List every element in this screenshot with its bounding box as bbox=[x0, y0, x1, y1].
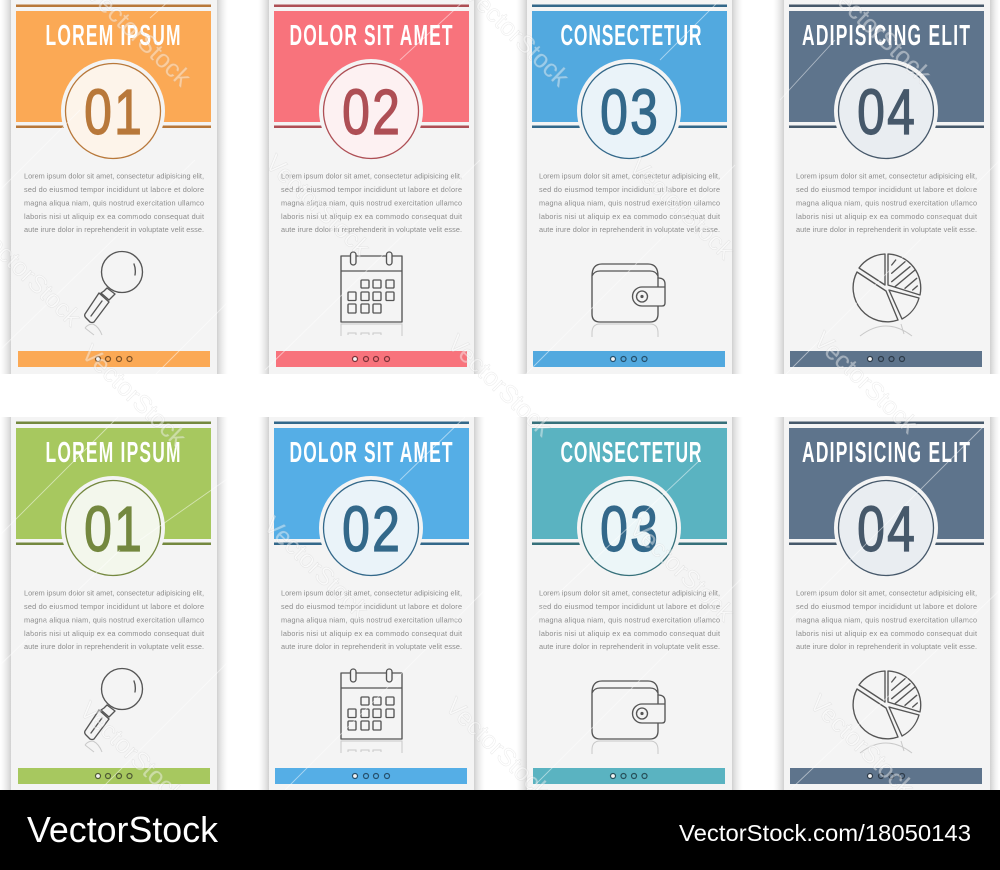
watermark text: VectorStock bbox=[624, 514, 740, 627]
image url: VectorStock.com/18050143 bbox=[679, 820, 971, 846]
panel: card 1 top row, orange bbox=[11, 0, 217, 374]
icon: magnifying glass bbox=[85, 668, 142, 752]
header band bbox=[274, 4, 469, 128]
icon: pie chart bbox=[853, 671, 921, 753]
footer band: branding bbox=[0, 790, 1000, 870]
footer bar with dots bbox=[533, 768, 725, 784]
body text: sed do eiusmod tempor incididunt ut labore et dolore bbox=[281, 185, 462, 194]
body text: Lorem ipsum dolor sit amet, consectetur adipisicing elit, bbox=[24, 172, 204, 180]
body text: laboris nisi ut aliquip ex ea commodo consequat duit bbox=[796, 212, 977, 221]
body text: laboris nisi ut aliquip ex ea commodo consequat duit bbox=[24, 212, 204, 221]
body text bbox=[539, 588, 720, 651]
body text: magna aliqua niam, quis nostrud exercitation ullamco bbox=[796, 198, 977, 208]
body text: magna aliqua niam, quis nostrud exercitation ullamco bbox=[24, 616, 204, 624]
watermark text: VectorStock bbox=[804, 689, 920, 802]
heading: CONSECTETUR bbox=[561, 20, 701, 52]
body text: magna aliqua niam, quis nostrud exercitation ullamco bbox=[539, 198, 720, 208]
body text: aute irure dolor in reprehenderit in voluptate velit esse. bbox=[281, 225, 462, 234]
body text: sed do eiusmod tempor incididunt ut labore et dolore bbox=[24, 185, 204, 194]
number badge: 03 bbox=[600, 494, 658, 565]
body text: sed do eiusmod tempor incididunt ut labore et dolore bbox=[281, 602, 462, 611]
icon: calendar bbox=[341, 252, 402, 336]
body text bbox=[539, 172, 720, 234]
body text: laboris nisi ut aliquip ex ea commodo consequat duit bbox=[281, 212, 462, 221]
body text: sed do eiusmod tempor incididunt ut labore et dolore bbox=[796, 602, 977, 611]
header band bbox=[532, 4, 727, 128]
watermark text: VectorStock bbox=[624, 152, 740, 265]
panel: card 2 bottom row, blue bbox=[269, 417, 474, 790]
heading: DOLOR SIT AMET bbox=[289, 20, 453, 52]
footer bar with dots bbox=[18, 351, 210, 367]
footer bar with dots bbox=[533, 351, 725, 367]
header band bbox=[532, 422, 727, 545]
body text: aute irure dolor in reprehenderit in voluptate velit esse. bbox=[24, 225, 204, 234]
icon: calendar bbox=[341, 669, 402, 753]
number badge bbox=[319, 476, 423, 580]
number badge bbox=[577, 59, 681, 163]
watermark text: VectorStock bbox=[260, 149, 376, 262]
body text: laboris nisi ut aliquip ex ea commodo consequat duit bbox=[796, 629, 977, 638]
body text: laboris nisi ut aliquip ex ea commodo consequat duit bbox=[24, 629, 204, 638]
panel: card 2 top row, red bbox=[269, 0, 474, 374]
number badge bbox=[319, 59, 423, 163]
body text bbox=[796, 588, 977, 651]
number badge: 02 bbox=[342, 77, 400, 148]
body text: magna aliqua niam, quis nostrud exercitation ullamco bbox=[796, 616, 977, 624]
panel: card 3 bottom row, teal bbox=[527, 417, 732, 790]
body text: magna aliqua niam, quis nostrud exercitation ullamco bbox=[281, 616, 462, 624]
footer bar with dots bbox=[790, 351, 982, 367]
body text: magna aliqua niam, quis nostrud exercitation ullamco bbox=[539, 616, 720, 624]
body text: laboris nisi ut aliquip ex ea commodo consequat duit bbox=[281, 629, 462, 638]
body text: aute irure dolor in reprehenderit in voluptate velit esse. bbox=[24, 642, 204, 651]
heading: DOLOR SIT AMET bbox=[289, 437, 453, 469]
header band bbox=[789, 422, 984, 545]
watermark text: VectorStock bbox=[74, 696, 190, 809]
body text: magna aliqua niam, quis nostrud exercitation ullamco bbox=[24, 198, 204, 208]
header band bbox=[789, 4, 984, 128]
panel: card 4 top row, slate bbox=[784, 0, 990, 374]
number badge: 04 bbox=[857, 494, 915, 565]
icon: wallet bbox=[592, 264, 665, 337]
body text bbox=[796, 172, 977, 234]
body text: sed do eiusmod tempor incididunt ut labore et dolore bbox=[539, 602, 720, 611]
header band bbox=[16, 4, 211, 128]
panel: card 4 bottom row, slate bbox=[784, 417, 990, 790]
body text: laboris nisi ut aliquip ex ea commodo consequat duit bbox=[539, 629, 720, 638]
heading: CONSECTETUR bbox=[561, 437, 701, 469]
watermark text: VectorStock bbox=[808, 326, 924, 439]
body text: Lorem ipsum dolor sit amet, consectetur adipisicing elit, bbox=[539, 172, 720, 180]
number badge bbox=[834, 476, 938, 580]
number badge: 03 bbox=[600, 77, 658, 148]
number badge: 01 bbox=[84, 494, 142, 565]
body text bbox=[24, 588, 204, 651]
watermark text: VectorStock bbox=[76, 339, 192, 452]
footer bar with dots bbox=[18, 768, 210, 784]
body text bbox=[281, 172, 462, 234]
body text: Lorem ipsum dolor sit amet, consectetur adipisicing elit, bbox=[281, 588, 462, 598]
heading: LOREM IPSUM bbox=[46, 437, 180, 469]
heading: ADIPISICING ELIT bbox=[802, 20, 970, 52]
number badge: 04 bbox=[857, 77, 915, 148]
number badge bbox=[61, 59, 165, 163]
number badge bbox=[61, 476, 165, 580]
footer bar with dots bbox=[276, 351, 467, 367]
watermark text: VectorStock bbox=[442, 329, 558, 442]
heading: ADIPISICING ELIT bbox=[802, 437, 970, 469]
body text: aute irure dolor in reprehenderit in voluptate velit esse. bbox=[796, 642, 977, 651]
icon: wallet bbox=[592, 681, 665, 754]
heading: LOREM IPSUM bbox=[46, 20, 180, 52]
body text: aute irure dolor in reprehenderit in voluptate velit esse. bbox=[281, 642, 462, 651]
body text: Lorem ipsum dolor sit amet, consectetur adipisicing elit, bbox=[281, 172, 462, 180]
body text: Lorem ipsum dolor sit amet, consectetur adipisicing elit, bbox=[796, 588, 977, 598]
watermark text: VectorStock bbox=[440, 692, 556, 805]
icon: pie chart bbox=[853, 254, 921, 336]
body text bbox=[281, 588, 462, 651]
body text: sed do eiusmod tempor incididunt ut labore et dolore bbox=[539, 185, 720, 194]
watermark text: VectorStock bbox=[258, 511, 374, 624]
body text: Lorem ipsum dolor sit amet, consectetur adipisicing elit, bbox=[796, 172, 977, 180]
header band bbox=[16, 422, 211, 545]
body text: sed do eiusmod tempor incididunt ut labore et dolore bbox=[24, 602, 204, 611]
body text: Lorem ipsum dolor sit amet, consectetur adipisicing elit, bbox=[24, 588, 204, 598]
number badge bbox=[577, 476, 681, 580]
number badge bbox=[834, 59, 938, 163]
number badge: 01 bbox=[84, 77, 142, 148]
footer bar with dots bbox=[275, 768, 467, 784]
brand name: VectorStock bbox=[27, 809, 219, 850]
header band bbox=[274, 422, 469, 545]
panel: card 3 top row, blue bbox=[527, 0, 732, 374]
body text bbox=[24, 172, 204, 234]
body text: magna aliqua niam, quis nostrud exercitation ullamco bbox=[281, 198, 462, 208]
icon: magnifying glass bbox=[85, 252, 142, 335]
body text: aute irure dolor in reprehenderit in voluptate velit esse. bbox=[539, 642, 720, 651]
footer bar with dots bbox=[790, 768, 982, 784]
body text: aute irure dolor in reprehenderit in voluptate velit esse. bbox=[539, 225, 720, 234]
body text: sed do eiusmod tempor incididunt ut labore et dolore bbox=[796, 185, 977, 194]
number badge: 02 bbox=[342, 494, 400, 565]
body text: aute irure dolor in reprehenderit in voluptate velit esse. bbox=[796, 225, 977, 234]
body text: laboris nisi ut aliquip ex ea commodo consequat duit bbox=[539, 212, 720, 221]
panel: card 1 bottom row, green bbox=[11, 417, 217, 790]
body text: Lorem ipsum dolor sit amet, consectetur adipisicing elit, bbox=[539, 588, 720, 598]
